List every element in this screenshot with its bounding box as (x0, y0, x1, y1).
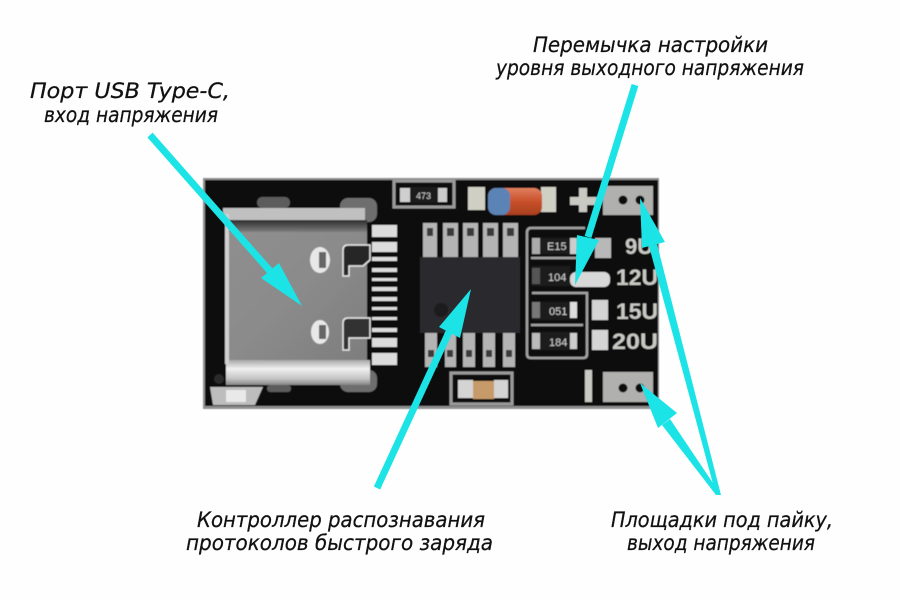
label: solder pads (611, 508, 833, 555)
arrow: controller (377, 289, 471, 488)
resistor 473: 473 (416, 191, 431, 201)
label: solder pads: Площадки под пайку, (611, 508, 833, 532)
solder pad plus (603, 186, 653, 215)
voltage labels (612, 234, 658, 354)
label: jumper: уровня выходного напряжения (495, 56, 804, 80)
connector holes (310, 247, 330, 344)
capacitor (451, 373, 512, 404)
label: USB port: вход напряжения (44, 103, 218, 127)
plus sign (570, 188, 597, 212)
solder pad minus (603, 372, 653, 402)
label: jumper: Перемычка настройки (533, 33, 768, 57)
label: USB port (30, 79, 230, 127)
controller chip (420, 223, 520, 367)
arrow: USB port (150, 135, 302, 306)
USB Type-C connector (210, 197, 397, 405)
resistor E15 (532, 238, 577, 254)
arrow: solder pad plus (640, 198, 721, 495)
resistor E15: E15 (547, 241, 567, 253)
label: USB port: Порт USB Type-C, (30, 79, 230, 103)
jumper pads (570, 238, 611, 350)
board body (203, 178, 659, 409)
voltage labels: 15U (616, 299, 658, 324)
arrow: solder pad minus (640, 383, 721, 495)
resistor 184: 184 (549, 337, 567, 349)
voltage labels: 20U (612, 329, 658, 354)
resistor outline group (527, 228, 587, 358)
label: solder pads: выход напряжения (627, 531, 815, 555)
connector pins (372, 225, 397, 365)
minus mark (585, 370, 592, 402)
resistor 104: 104 (548, 272, 566, 284)
diode (468, 187, 556, 215)
resistor 150 (532, 302, 577, 320)
voltage labels: 9U (625, 234, 653, 259)
arrow: jumper (575, 85, 635, 285)
PCB board photo (203, 178, 659, 409)
resistor 104 (532, 266, 570, 286)
resistor 473 (394, 181, 454, 207)
resistor 150: 051 (549, 306, 567, 318)
label: controller: протоколов быстрого заряда (186, 531, 493, 555)
voltage labels: 12U (616, 265, 658, 290)
resistor 184 (532, 332, 577, 350)
label: controller (186, 508, 493, 555)
label: controller: Контроллер распознавания (197, 508, 485, 532)
label: jumper (495, 33, 804, 80)
